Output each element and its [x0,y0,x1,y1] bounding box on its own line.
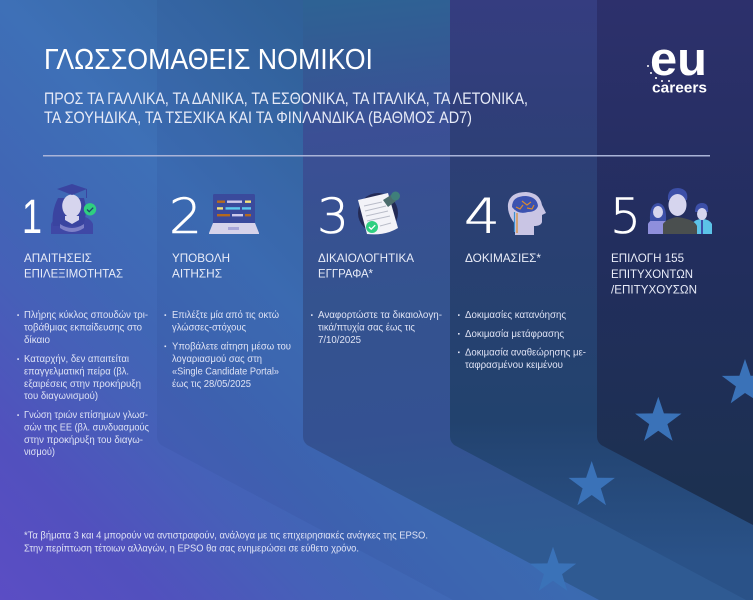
step 4 bullets: ταφρασμένου κειμένου [465,359,563,371]
footnote: Στην περίπτωση τέτοιων αλλαγών, η EPSO θα σας ενημερώσει σε εύθετο χρόνο. [24,542,359,554]
icon: documents [358,192,400,234]
icon: laptop [209,194,259,234]
step 3 heading: ΔΙΚΑΙΟΛΟΓΗΤΙΚΑ [318,251,414,265]
step 2 [164,189,291,390]
step 3 [311,189,442,346]
step 1 bullets: τοβάθμιας εκπαίδευσης στο [24,322,142,334]
step 2 bullets [164,309,291,390]
step 2 bullets: Επιλέξτε μία από τις οκτώ [172,309,279,321]
step 1 [17,184,149,458]
step 1 heading [24,251,123,281]
step 1 bullets: στην προκήρυξη του διαγω- [24,434,143,446]
panel: step 5 column [597,0,753,525]
step 2 bullets: γλώσσες-στόχους [172,322,246,334]
step 2 heading [172,251,230,281]
step 1 bullets: Πλήρης κύκλος σπουδών τρι- [24,309,148,321]
logo: EU careers: eu [650,32,707,85]
step 1 bullets: επαγγελματική πείρα (βλ. [24,366,129,378]
step 5 [610,188,712,296]
step 5 heading: ΕΠΙΤΥΧΟΝΤΩΝ [611,267,693,281]
title: ΓΛΩΣΣΟΜΑΘΕΙΣ ΝΟΜΙΚΟΙ [44,44,373,76]
step 5 heading: ΕΠΙΛΟΓΗ 155 [611,251,684,265]
step 3 bullets: Αναφορτώστε τα δικαιολογη- [318,309,442,321]
step 3 heading [318,251,414,281]
icon: graduate [51,184,96,234]
step 3 number: 3 [317,189,349,245]
step 2 heading: ΥΠΟΒΟΛΗ [172,251,230,265]
icon: group of people [648,188,712,234]
step 1 bullets: Γνώση τριών επίσημων γλωσ- [24,409,148,421]
step 1 number: 1 [22,191,42,244]
step 1 bullets: νισμού) [24,446,55,458]
step 3 heading: ΕΓΓΡΑΦΑ* [318,267,373,281]
icon: head with brain [508,192,546,235]
step 5 number: 5 [610,189,641,245]
step 3 bullets: 7/10/2025 [318,334,361,346]
subtitle: ΤΑ ΣΟΥΗΔΙΚΑ, ΤΑ ΤΣΕΧΙΚΑ ΚΑΙ ΤΑ ΦΙΝΛΑΝΔΙΚΑ (ΒΑΘΜΟΣ AD7) [44,108,472,127]
panel: step 2 column [157,0,753,600]
panel: step 3 column [303,0,753,600]
step 5 heading [611,251,697,296]
step 3 bullets: τικά/πτυχία σας έως τις [318,322,415,334]
step 2 bullets: λογαριασμού σας στη [172,353,262,365]
step 4 number: 4 [464,189,500,245]
step 3 bullets [311,309,442,346]
stars [530,359,753,591]
step 2 bullets: έως τις 28/05/2025 [172,378,251,390]
panel: step 4 column [450,0,753,600]
step 4 bullets: Δοκιμασία μετάφρασης [465,328,564,340]
step 1 bullets: σών της ΕΕ (βλ. συνδυασμούς [24,422,149,434]
step 2 bullets: «Single Candidate Portal» [172,366,279,378]
subtitle [44,89,528,127]
step 1 heading: ΕΠΙΛΕΞΙΜΟΤΗΤΑΣ [24,267,123,281]
step 4 [458,189,586,371]
step 2 bullets: Υποβάλετε αίτηση μέσω του [172,340,291,352]
step 2 heading: ΑΙΤΗΣΗΣ [172,267,222,281]
logo: EU careers: careers [652,81,707,97]
step 1 bullets: του διαγωνισμού) [24,390,98,402]
step 4 bullets: Δοκιμασία αναθεώρησης με- [465,346,586,358]
step 4 bullets [458,309,586,371]
step 1 heading: ΑΠΑΙΤΗΣΕΙΣ [24,251,92,265]
step 5 heading: /ΕΠΙΤΥΧΟΥΣΩΝ [611,282,697,296]
step 4 heading: ΔΟΚΙΜΑΣΙΕΣ* [465,251,541,265]
footnote [24,530,428,554]
step 1 bullets: Καταρχήν, δεν απαιτείται [24,353,130,365]
step 2 number: 2 [169,189,202,245]
footnote: *Τα βήματα 3 και 4 μπορούν να αντιστραφούν, ανάλογα με τις επιχειρησιακές ανάγκες της EPSO. [24,530,428,542]
step 4 bullets: Δοκιμασίες κατανόησης [465,309,566,321]
step 1 bullets [17,309,149,458]
step 1 bullets: δίκαιο [24,334,50,346]
subtitle: ΠΡΟΣ ΤΑ ΓΑΛΛΙΚΑ, ΤΑ ΔΑΝΙΚΑ, ΤΑ ΕΣΘΟΝΙΚΑ, ΤΑ ΙΤΑΛΙΚΑ, ΤΑ ΛΕΤΟΝΙΚΑ, [44,89,528,108]
step 1 bullets: εξαιρέσεις στην προκήρυξη [24,378,141,390]
